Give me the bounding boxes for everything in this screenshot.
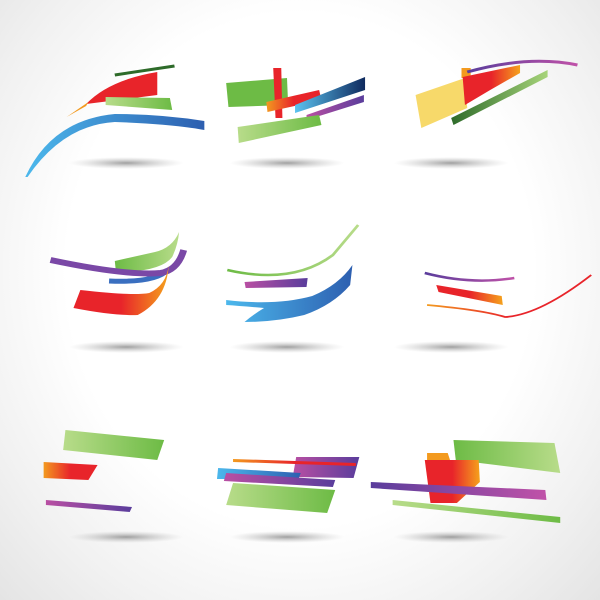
shadows <box>69 157 509 543</box>
logo 1 <box>25 66 204 177</box>
logo 4 <box>51 232 184 315</box>
logo 7 <box>44 430 164 512</box>
logo 8 <box>217 457 359 513</box>
logo 2 <box>226 68 365 143</box>
logo 6 <box>425 273 591 317</box>
logo 9 <box>371 440 560 523</box>
logo 3 <box>416 61 577 128</box>
logo 5 <box>226 225 358 322</box>
